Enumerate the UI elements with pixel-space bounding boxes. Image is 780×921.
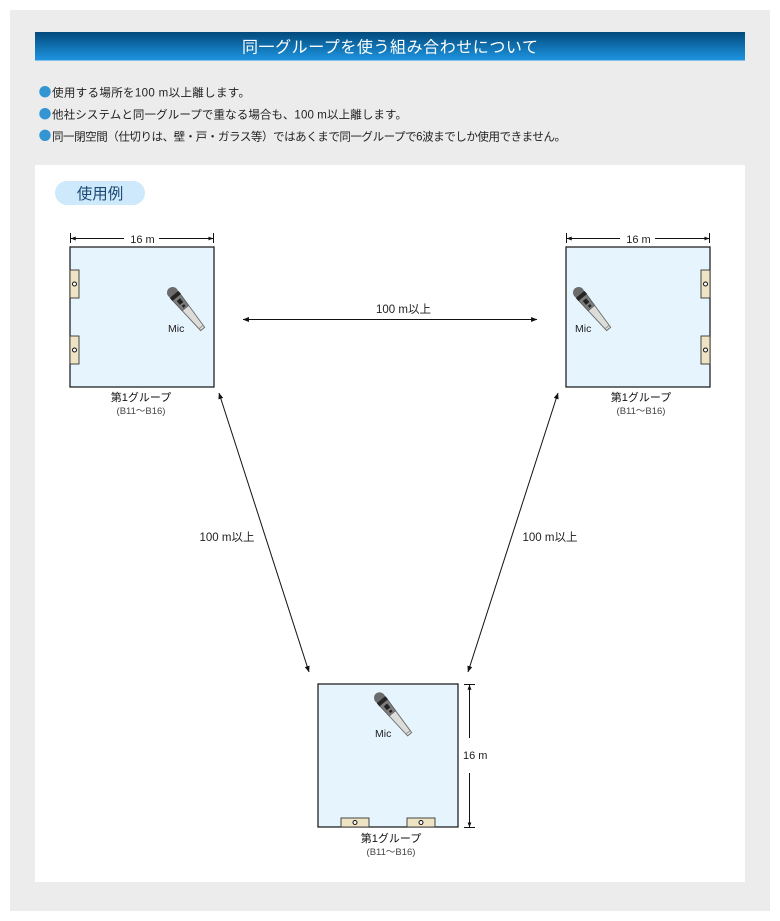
room 1 label: [111, 390, 171, 417]
microphone: [372, 690, 414, 738]
rules list: [39, 86, 566, 144]
title banner: [35, 32, 745, 60]
room 3: [318, 684, 458, 827]
room 1 label: 第1グループ: [111, 390, 171, 404]
microphone: [571, 285, 613, 332]
room 3 height dimension: 16 m: [463, 750, 487, 762]
room 3 label: (B11〜B16): [367, 847, 415, 858]
rule 1: 使用する場所を100 m以上離します。: [52, 86, 250, 100]
distance label top: 100 m以上: [376, 303, 431, 316]
speaker 1: [341, 818, 369, 827]
room 3 height dimension: [463, 684, 487, 828]
speaker 2: [407, 818, 435, 827]
room 1 width dimension: 16 m: [130, 234, 155, 246]
distance label left: 100 m以上: [200, 531, 254, 544]
room 2: [566, 247, 710, 387]
room 2 label: 第1グループ: [611, 390, 671, 404]
arrow: room 2 to room 3: [468, 393, 558, 672]
mic label: Mic: [575, 323, 591, 335]
example heading pill: [55, 181, 145, 205]
room 2 width dimension: 16 m: [626, 234, 651, 246]
title banner: 同一グループを使う組み合わせについて: [242, 38, 538, 56]
example heading pill: 使用例: [77, 185, 123, 203]
example panel: [35, 165, 745, 882]
speaker 1: [70, 270, 79, 298]
room 1: [70, 247, 214, 387]
mic label: Mic: [375, 728, 391, 740]
rule 2: 他社システムと同一グループで重なる場合も、100 m以上離します。: [52, 108, 407, 122]
arrow: room 1 to room 2: [243, 318, 537, 320]
room 2 width dimension: [566, 233, 710, 246]
distance label right: 100 m以上: [523, 531, 577, 544]
room 3 label: 第1グループ: [361, 831, 421, 845]
room 1 width dimension: [70, 233, 214, 246]
speaker 2: [701, 336, 710, 364]
speaker 1: [701, 270, 710, 298]
arrow: room 1 to room 3: [219, 393, 309, 672]
room 3 label: [361, 831, 421, 858]
room 2 label: [611, 390, 671, 417]
rule 3: 同一閉空間（仕切りは、壁・戸・ガラス等）ではあくまで同一グループで6波までしか使用できません。: [52, 130, 566, 144]
room 2 label: (B11〜B16): [617, 406, 665, 417]
mic label: Mic: [168, 323, 184, 335]
speaker 2: [70, 336, 79, 364]
microphone: [165, 285, 207, 332]
room 1 label: (B11〜B16): [117, 406, 165, 417]
